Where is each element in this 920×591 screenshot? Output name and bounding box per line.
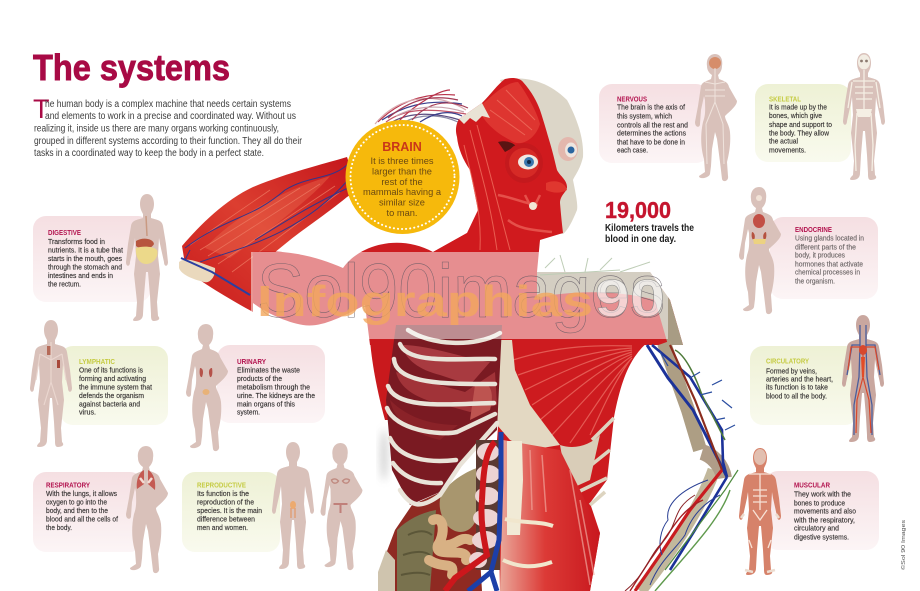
panel: lymphatic: forming and activating [79, 374, 146, 383]
panel: lymphatic: against bacteria and [79, 400, 140, 409]
figure: skeleton [843, 53, 885, 180]
panel: urinary: main organs of this [237, 400, 295, 409]
panel: reproductive: species. It is the main [197, 506, 262, 515]
skull [500, 78, 583, 234]
figure: nervous system [695, 54, 737, 181]
intro text block: tasks in a coordinated way to keep the body in a perfect state. [34, 148, 264, 159]
panel: nervous: each case. [617, 146, 648, 155]
panel: lymphatic: LYMPHATIC [79, 359, 115, 366]
panel: skeletal: bones, which give [769, 111, 822, 120]
panel: lymphatic: defends the organism [79, 391, 144, 400]
ribs [387, 330, 500, 504]
panel: lymphatic [30, 320, 168, 447]
panel: respiratory: With the lungs, it allows [46, 489, 117, 498]
panel: muscular: circulatory and [794, 524, 839, 533]
sternum and beige fascia [497, 340, 560, 450]
brain callout: It is three times [370, 156, 434, 166]
panel: muscular: They work with the [794, 490, 851, 499]
panel: nervous: controls all the rest and [617, 121, 688, 130]
brain callout: similar size [379, 198, 425, 208]
figure: endocrine system [739, 187, 781, 314]
panel: reproductive: REPRODUCTIVE [197, 483, 246, 490]
panel: urinary: URINARY [237, 359, 266, 366]
panel: endocrine: body, it produces [795, 251, 845, 260]
figure: lymphatic system [30, 320, 72, 447]
panel: digestive: DIGESTIVE [48, 230, 81, 237]
panel: urinary: system. [237, 408, 260, 417]
vessels from head to arm [375, 90, 468, 124]
eyes [518, 137, 578, 170]
intro text block: realizing it, inside us there are many organs working continuously, [34, 124, 279, 134]
panel: nervous: this system, which [617, 112, 672, 121]
panel: reproductive: difference between [197, 515, 255, 524]
figure: muscular system [739, 448, 781, 575]
head muscles [433, 78, 567, 252]
brain callout: mammals having a [363, 187, 442, 197]
panel: skeletal: movements. [769, 146, 806, 155]
figure: respiratory system [126, 446, 168, 573]
upper arm and shoulder [253, 233, 683, 345]
panel: skeletal: It is made up by the [769, 103, 827, 112]
panel: muscular: digestive systems. [794, 533, 849, 542]
panel: respiratory: the body. [46, 523, 72, 532]
panel: muscular: bones to produce [794, 499, 845, 508]
intro text block: he human body is a complex machine that needs certain systems [45, 99, 291, 110]
panel: skeletal [755, 53, 885, 180]
panel: reproductive: Its function is the [197, 489, 249, 498]
figure: male reproductive [272, 442, 314, 569]
panel: circulatory [750, 315, 884, 442]
intestines and stomach [378, 468, 482, 591]
brain callout: larger than the [372, 166, 432, 176]
stat: 19,000 kilometers [605, 197, 694, 245]
panel: muscular [739, 448, 879, 575]
figure: urinary system [186, 324, 228, 451]
intro text block: and elements to work in a precise and coordinated way. Without us [45, 111, 296, 122]
panel: respiratory: oxygen to go into the [46, 498, 107, 507]
panel: digestive: Transforms food in [48, 237, 105, 246]
figure: female reproductive [320, 443, 362, 570]
panel: urinary [186, 324, 325, 451]
panel: muscular: movements and also [794, 507, 856, 516]
panel: endocrine: Using glands located in [795, 234, 864, 243]
panel: skeletal: shape and support to [769, 120, 832, 129]
panel: circulatory: CIRCULATORY [766, 359, 809, 366]
brain callout: BRAIN [382, 140, 422, 154]
panel: skeletal: the actual [769, 137, 798, 146]
panel: nervous: NERVOUS [617, 97, 647, 104]
panel: skeletal: SKELETAL [769, 97, 801, 104]
panel: circulatory: blood to all the body. [766, 392, 827, 401]
panel: reproductive: reproduction of the [197, 498, 254, 507]
brain callout: rest of the [381, 177, 423, 187]
left torso red edge [370, 340, 398, 420]
panel: digestive: the rectum. [48, 280, 81, 288]
intro text block [33, 94, 303, 159]
panel: circulatory: its function is to take [766, 383, 828, 392]
shadow at back [380, 429, 388, 481]
abdominal muscles [500, 440, 600, 591]
panel: urinary: Eliminates the waste [237, 366, 300, 375]
main anatomical figure [179, 78, 738, 591]
panel: respiratory [33, 446, 168, 573]
panel: lymphatic: the immune system that [79, 382, 152, 391]
panel: respiratory: blood and all the cells of [46, 515, 119, 524]
panel: endocrine [739, 187, 878, 314]
panel: endocrine: the organism. [795, 277, 835, 286]
chest fibres [513, 346, 632, 443]
lower arm vessels and bones [625, 343, 738, 591]
stat: 19,000 kilometers: Kilometers travels the [605, 223, 694, 234]
watermark band: Infographias [257, 277, 593, 326]
panel: endocrine: chemical processes in [795, 268, 860, 277]
title: The systems [33, 47, 230, 88]
panel: nervous [599, 54, 737, 181]
panel: digestive: starts in the mouth, goes [48, 254, 122, 263]
panel: endocrine: ENDOCRINE [795, 227, 832, 234]
panel: digestive [33, 194, 168, 321]
panel: endocrine: different parts of the [795, 243, 856, 252]
twigs on shoulder [540, 255, 650, 275]
panel: digestive: through the stomach and [48, 262, 122, 272]
spine discs [469, 440, 500, 570]
panel: skeletal: the body. They allow [769, 129, 830, 138]
watermark band: 90 [595, 270, 665, 328]
panel: urinary: urine. The kidneys are the [237, 391, 315, 400]
rib cage interior and lungs [386, 325, 502, 505]
vena cava [468, 432, 501, 591]
serratus bands [578, 418, 614, 505]
panel: nervous: determines the actions [617, 129, 686, 138]
panel: nervous: that have to be done in [617, 138, 685, 147]
stat: 19,000 kilometers: blood in one day. [605, 234, 676, 245]
panel: digestive: nutrients. It is a tube that [48, 246, 123, 254]
shoulder tan [537, 272, 683, 345]
figure: digestive system [126, 194, 168, 321]
panel: circulatory: Formed by veins, [766, 367, 817, 376]
intro text block: grouped in different systems according to their function. They all do their [34, 136, 303, 147]
watermark band: Sol90images [257, 249, 665, 334]
copyright note: ©Sol 90 Images [900, 519, 907, 570]
panel: urinary: products of the [237, 374, 282, 383]
panel: lymphatic: virus. [79, 408, 96, 417]
panel: muscular: with the respiratory, [793, 516, 855, 525]
panel: digestive: intestines and ends in [48, 271, 113, 280]
panel: urinary: metabolism through the [237, 382, 310, 391]
torso right: muscle mass [497, 340, 650, 591]
aorta [445, 442, 495, 591]
figure: circulatory system [842, 315, 884, 442]
panel: reproductive [182, 442, 362, 570]
panel: respiratory: RESPIRATORY [46, 483, 90, 490]
intro text block: T [33, 94, 50, 124]
brain callout [346, 120, 460, 234]
panel: reproductive: men and women. [197, 523, 248, 532]
brain callout: to man. [386, 208, 418, 218]
panel: muscular: MUSCULAR [794, 483, 830, 490]
stat: 19,000 kilometers: 19,000 [605, 197, 671, 223]
panel: circulatory: arteries and the heart, [766, 375, 833, 384]
panel: respiratory: body, and then to the [46, 506, 108, 515]
panel: endocrine: hormones that activate [795, 260, 863, 269]
panel: nervous: The brain is the axis of [617, 103, 686, 112]
panel: lymphatic: One of its functions is [79, 366, 143, 375]
raised arm [179, 157, 358, 312]
